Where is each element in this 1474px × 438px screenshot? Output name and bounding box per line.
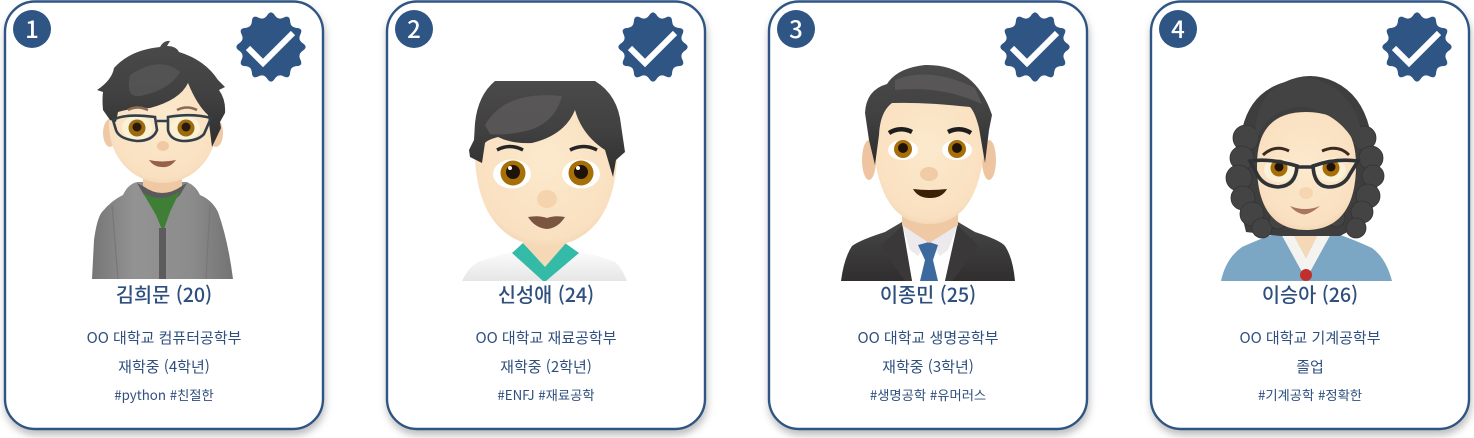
card 2 <box>387 2 705 429</box>
name: 이승아 (26) <box>1262 279 1358 308</box>
name: 이종민 (25) <box>880 279 976 308</box>
avatar: woman with curly hair and glasses <box>1221 76 1392 281</box>
number badge 4 <box>1159 10 1197 48</box>
avatar: boy with glasses and gray hoodie <box>92 41 233 279</box>
department: OO 대학교 재료공학부 <box>475 327 617 348</box>
number badge 2 <box>395 10 433 48</box>
card frame <box>387 2 705 429</box>
number badge 1: 1 <box>25 10 39 45</box>
status: 졸업 <box>1296 356 1324 377</box>
card frame <box>769 2 1087 429</box>
hashtags: #python #친절한 <box>114 385 214 404</box>
department: OO 대학교 컴퓨터공학부 <box>87 327 242 348</box>
hashtags: #생명공학 #유머러스 <box>870 385 986 404</box>
card frame <box>1151 2 1469 429</box>
status: 재학중 (4학년) <box>118 356 210 377</box>
number badge 3 <box>777 10 815 48</box>
name: 신성애 (24) <box>498 279 594 308</box>
avatar: man in suit and blue tie <box>841 65 1015 281</box>
card 1 <box>5 2 323 429</box>
number badge 4: 4 <box>1171 10 1185 45</box>
card 4 <box>1151 2 1469 429</box>
status: 재학중 (2학년) <box>500 356 592 377</box>
icon: verified check badge <box>618 12 688 82</box>
name: 김희문 (20) <box>116 279 212 308</box>
department: OO 대학교 기계공학부 <box>1239 327 1381 348</box>
icon: verified check badge <box>1000 12 1070 82</box>
hashtags: #ENFJ #재료공학 <box>497 385 595 404</box>
icon: verified check badge <box>236 12 306 82</box>
number badge 1 <box>13 10 51 48</box>
department: OO 대학교 생명공학부 <box>857 327 999 348</box>
status: 재학중 (3학년) <box>882 356 974 377</box>
avatar: person with dark hair and teal collar <box>462 81 627 281</box>
hashtags: #기계공학 #정확한 <box>1258 385 1362 404</box>
icon: verified check badge <box>1382 12 1452 82</box>
card 3 <box>769 2 1087 429</box>
number badge 3: 3 <box>789 10 803 45</box>
card frame <box>5 2 323 429</box>
number badge 2: 2 <box>407 10 421 45</box>
